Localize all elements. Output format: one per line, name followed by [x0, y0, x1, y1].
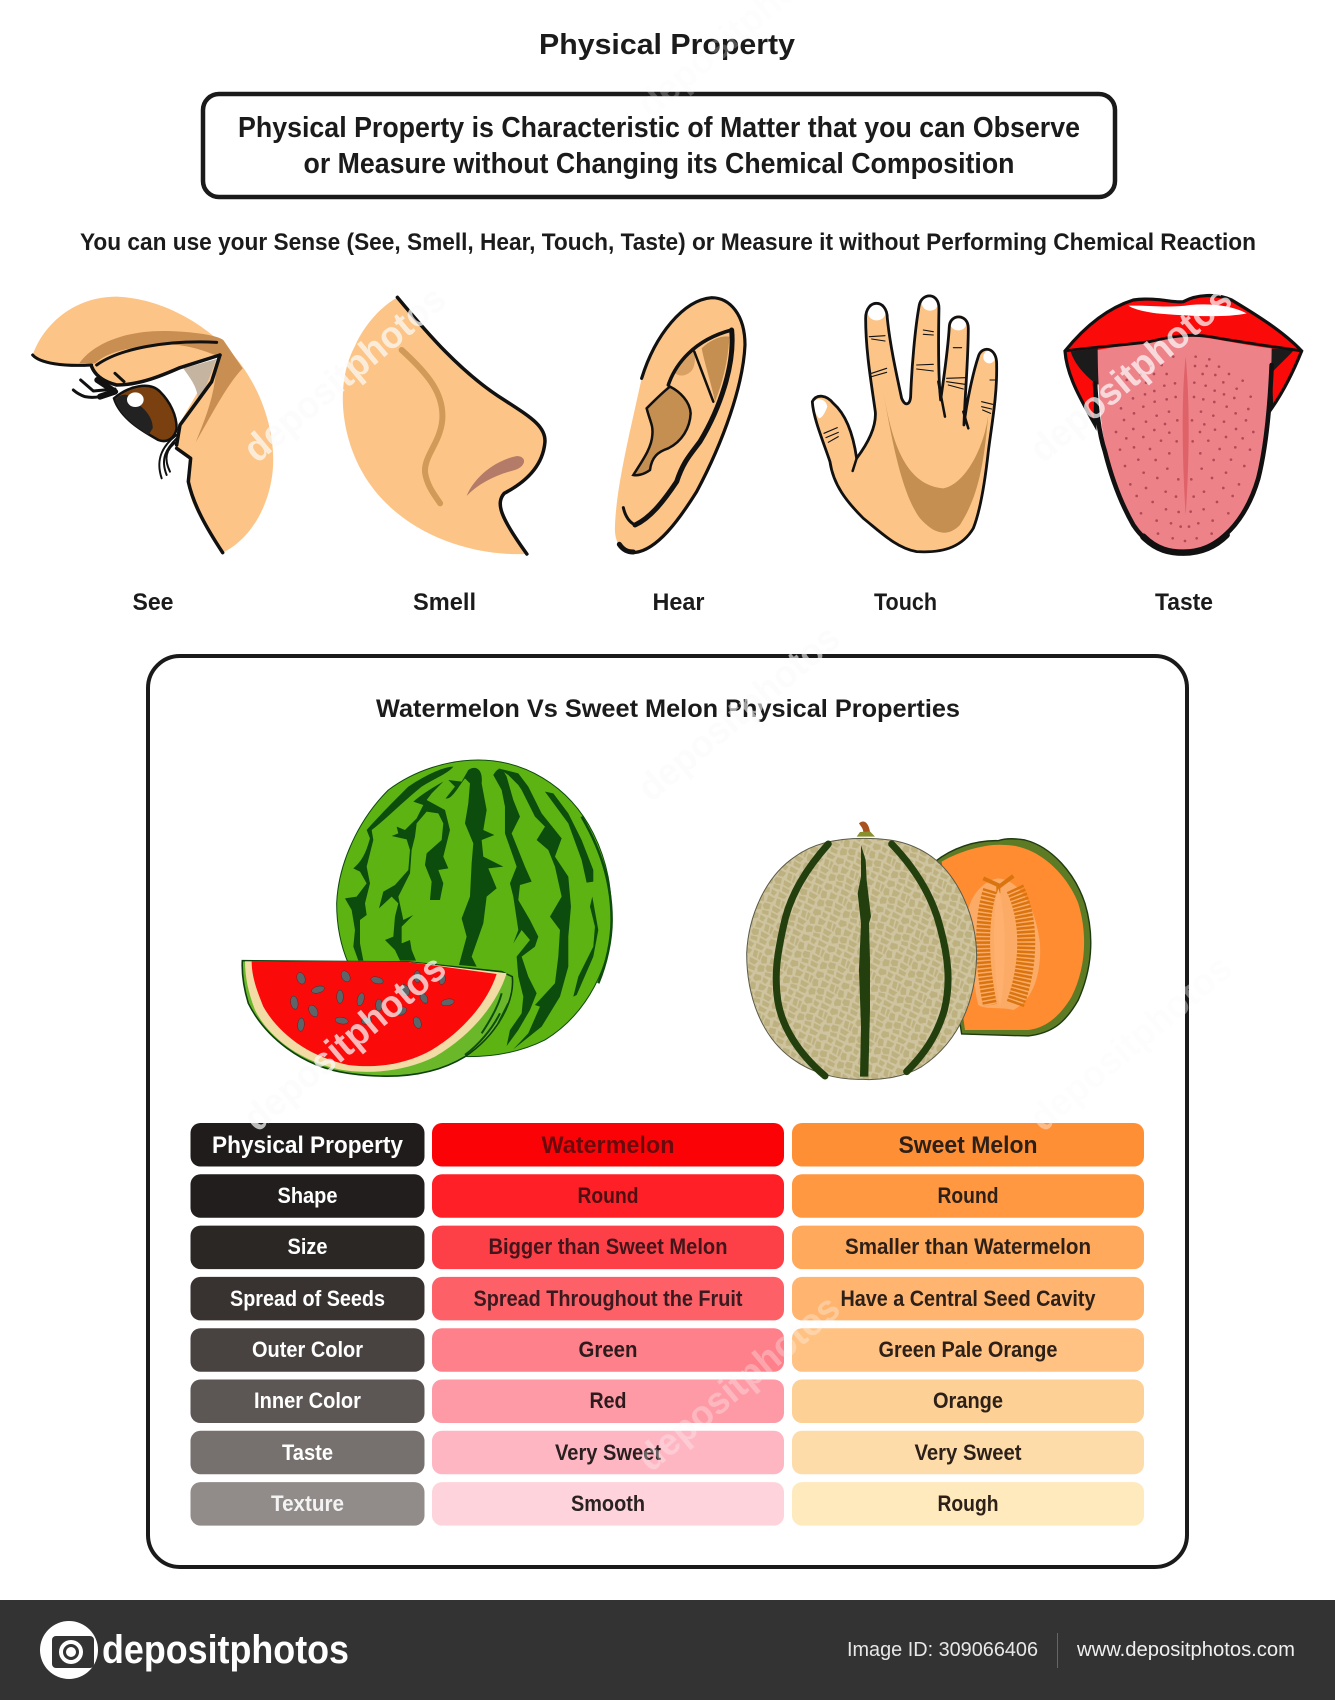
- watermarks: depositphotos: [630, 617, 848, 810]
- icon: logo: [40, 1621, 98, 1679]
- icon: eye: [33, 297, 273, 553]
- definition box: Physical Property is Characteristic of Matter that you can Observe: [238, 112, 1080, 144]
- column: sweet melon: Have a Central Seed Cavity: [840, 1286, 1096, 1311]
- sense labels: See: [132, 589, 174, 616]
- definition box: [203, 94, 1115, 197]
- definition box: or Measure without Changing its Chemical Composition: [304, 148, 1014, 180]
- column: physical property: Physical Property: [212, 1132, 404, 1159]
- watermarks: depositphotos: [630, 1287, 848, 1480]
- column: physical property: Taste: [282, 1440, 333, 1465]
- column: physical property: Outer Color: [252, 1337, 363, 1362]
- icon: sweet melon: [747, 821, 1091, 1080]
- column: watermelon: [432, 1123, 784, 1526]
- column: watermelon: Bigger than Sweet Melon: [488, 1234, 728, 1259]
- column: sweet melon: Sweet Melon: [898, 1132, 1038, 1159]
- website: www.depositphotos.com: [1076, 1639, 1295, 1661]
- watermarks: depositphotos: [1022, 947, 1240, 1140]
- icon: nose: [343, 297, 545, 554]
- column: watermelon: Round: [578, 1183, 638, 1208]
- subtitle: You can use your Sense (See, Smell, Hear, Touch, Taste) or Measure it without Performing Chemical Reaction: [80, 229, 1256, 256]
- column: watermelon: Smooth: [571, 1491, 645, 1516]
- column: watermelon: Watermelon: [542, 1132, 674, 1159]
- image id: Image ID: 309066406: [847, 1639, 1038, 1661]
- icon: ear: [615, 298, 745, 553]
- icon: tongue and lips: [1065, 296, 1302, 553]
- watermarks: [236, 0, 1240, 1480]
- watermarks: depositphotos: [1022, 278, 1240, 471]
- column: sweet melon: Rough: [938, 1491, 998, 1516]
- column: watermelon: Spread Throughout the Fruit: [474, 1286, 743, 1311]
- column: sweet melon: Very Sweet: [914, 1440, 1022, 1465]
- column: sweet melon: Round: [938, 1183, 998, 1208]
- column: sweet melon: Orange: [933, 1388, 1003, 1413]
- watermarks: depositphotos: [236, 278, 454, 471]
- title: Physical Property: [539, 29, 795, 61]
- sense labels: Touch: [874, 589, 937, 616]
- watermarks: depositphotos: [236, 947, 454, 1140]
- sense labels: Hear: [652, 589, 704, 616]
- column: physical property: Shape: [278, 1183, 338, 1208]
- sense labels: Taste: [1155, 589, 1213, 616]
- column: physical property: Texture: [271, 1491, 344, 1516]
- sense labels: [132, 589, 1213, 616]
- icon: watermelon: [242, 760, 612, 1076]
- column: sweet melon: [792, 1123, 1144, 1526]
- icon: hand: [812, 296, 997, 552]
- column: watermelon: Red: [590, 1388, 626, 1413]
- column: physical property: Inner Color: [254, 1388, 361, 1413]
- comparison table: [190, 1123, 1144, 1526]
- column: physical property: Spread of Seeds: [230, 1286, 385, 1311]
- column: sweet melon: Smaller than Watermelon: [845, 1234, 1091, 1259]
- column: sweet melon: Green Pale Orange: [878, 1337, 1058, 1362]
- sense labels: Smell: [413, 589, 476, 616]
- panel: watermelon vs sweet melon: [148, 656, 1187, 1567]
- brand name: depositphotos: [102, 1628, 349, 1672]
- column: watermelon: Green: [578, 1337, 638, 1362]
- column: watermelon: Very Sweet: [555, 1440, 662, 1465]
- column: physical property: [190, 1123, 424, 1526]
- column: physical property: Size: [288, 1234, 328, 1259]
- footer bar: [0, 1600, 1335, 1700]
- panel heading: Watermelon Vs Sweet Melon Physical Properties: [376, 695, 960, 723]
